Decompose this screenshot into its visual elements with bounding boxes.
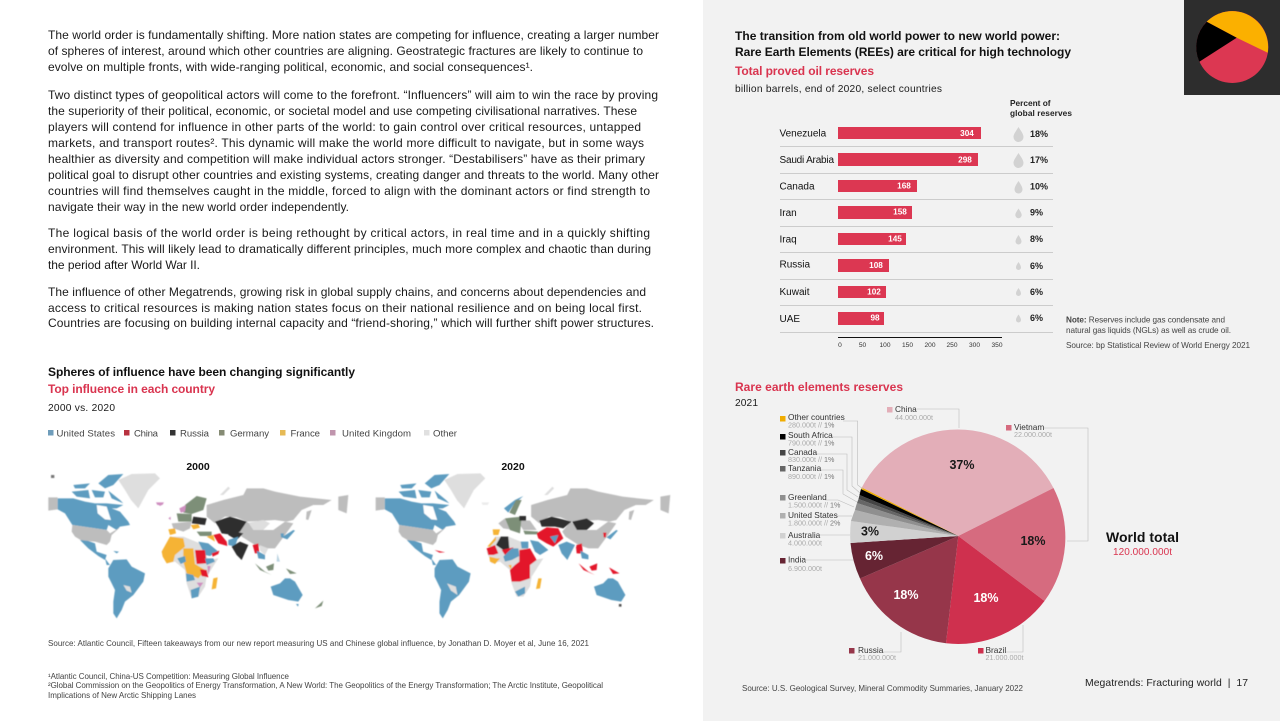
- body text: Countries are focusing on building internal capacity and “friend-shoring,” which will further shift power structures.: [48, 316, 654, 330]
- map legend: France: [290, 428, 320, 440]
- map: 2020: [376, 473, 670, 618]
- bar chart: oil reserves: 145: [888, 234, 902, 244]
- bar chart: oil reserves: 18%: [1030, 129, 1048, 139]
- heading: transition to new world power: Total proved oil reserves: [735, 64, 874, 78]
- bar chart: oil reserves: Saudi Arabia: [780, 155, 834, 166]
- bar chart: oil reserves: 6%: [1030, 313, 1043, 323]
- pie labels: left: 1.500.000t // 1%: [788, 500, 841, 510]
- pie labels: left: Tanzania: [788, 463, 822, 473]
- bar chart: oil reserves: 150: [902, 342, 913, 349]
- pie labels: left: Greenland: [788, 492, 827, 502]
- world total callout: [1106, 529, 1179, 558]
- pie labels: left: United States: [788, 510, 838, 520]
- map legend: China: [134, 428, 159, 440]
- body text: The world order is fundamentally shifting. More nation states are competing for influence, creating a larger number: [48, 28, 659, 42]
- body text: markets, and transport routes². This dynamic will make the world more difficult to navigate, but in some ways: [48, 136, 644, 150]
- pie labels: left: Canada: [788, 447, 817, 457]
- bar chart: oil reserves: 98: [870, 314, 880, 322]
- map legend: Other: [433, 428, 458, 440]
- pie labels: top and bottom: [849, 404, 1052, 662]
- pie labels: left: 830.000t // 1%: [788, 455, 835, 464]
- world total callout: World total: [1106, 529, 1179, 545]
- pie chart: rare earth reserves: [850, 430, 1065, 644]
- bar chart: oil reserves: UAE: [780, 314, 800, 325]
- bar chart: oil reserves: Iraq: [780, 234, 797, 246]
- bar chart: oil reserves: 50: [859, 342, 866, 349]
- pie labels: left: 6.900.000t: [788, 564, 822, 573]
- map label: 2020: 2020: [501, 461, 525, 473]
- bar chart: oil reserves: [780, 127, 1053, 349]
- bar chart: oil reserves: 158: [893, 208, 907, 216]
- footnotes: ²Global Commission on the Geopolitics of Energy Transformation, A New World: The Geopolitics of the Energy Transformation; The Arctic Institute, Geopolitical: [48, 681, 603, 690]
- pie chart: rare earth reserves: 18%: [893, 588, 919, 602]
- pie labels: left: 1.800.000t // 2%: [788, 518, 841, 528]
- pie labels: top and bottom: Brazil: [986, 645, 1006, 655]
- pie labels: top and bottom: Russia: [858, 645, 884, 655]
- world total callout: 120.000.000t: [1113, 547, 1172, 558]
- pie labels: top and bottom: China: [895, 404, 917, 414]
- bar chart: oil reserves: 108: [869, 261, 883, 270]
- bar chart: oil reserves: Russia: [780, 260, 811, 270]
- pie chart: rare earth reserves: 18%: [1020, 534, 1046, 548]
- body text: [48, 28, 659, 330]
- map: 2000: [48, 473, 348, 618]
- heading: spheres of influence: 2000 vs. 2020: [48, 403, 115, 414]
- note and source: oil reserves: [1066, 316, 1250, 350]
- bar chart: oil reserves: 200: [924, 342, 936, 349]
- bar chart: oil reserves: 17%: [1030, 155, 1048, 165]
- bar chart: oil reserves: 6%: [1030, 287, 1043, 297]
- bar chart: oil reserves: 304: [960, 129, 974, 138]
- heading: rare earth elements: 2021: [735, 398, 758, 409]
- map legend: [48, 428, 458, 440]
- bar chart: oil reserves: 6%: [1030, 261, 1043, 271]
- column heading: percent of global reserves: global reserves: [1010, 108, 1072, 118]
- body text: players will contend for influence in other parts of the world: to gain control over critical resources, untapped: [48, 120, 641, 134]
- note and source: oil reserves: Note: Reserves include gas condensate and: [1066, 316, 1225, 324]
- bar chart: oil reserves: 350: [991, 342, 1003, 349]
- pie labels: left: 890.000t // 1%: [788, 472, 835, 481]
- heading: rare earth elements: [735, 380, 903, 409]
- bar chart: oil reserves: 8%: [1030, 234, 1043, 244]
- bar chart: oil reserves: 168: [897, 182, 911, 190]
- footnotes: [48, 672, 603, 700]
- pie labels: left: Australia: [788, 530, 821, 540]
- note and source: oil reserves: natural gas liquids (NGLs) as well as crude oil.: [1066, 326, 1231, 335]
- body text: political goal to disrupt other countries and existing systems, creating danger and threats to the world. Many other: [48, 168, 659, 182]
- source: pie: Source: U.S. Geological Survey, Mineral Commodity Summaries, January 2022: [742, 684, 1024, 693]
- body text: Two distinct types of geopolitical actors will come to the forefront. “Influencers” will aim to win the race by proving: [48, 88, 658, 102]
- heading: spheres of influence: [48, 365, 355, 414]
- pie labels: top and bottom: 22.000.000t: [1014, 430, 1052, 439]
- panel: right background: [703, 0, 1280, 721]
- bar chart: oil reserves: 10%: [1030, 182, 1048, 192]
- bar chart: oil reserves: 250: [946, 342, 958, 349]
- body text: healthier as diversity and competition will make individual actors stronger. “Destabilisers” have as their primary: [48, 152, 645, 166]
- footnotes: ¹Atlantic Council, China-US Competition: Measuring Global Influence: [48, 672, 290, 681]
- map legend: Germany: [230, 428, 269, 440]
- heading: transition to new world power: Rare Earth Elements (REEs) are critical for high technology: [735, 45, 1071, 59]
- pie labels: left: 790.000t // 1%: [788, 438, 835, 448]
- heading: transition to new world power: [735, 29, 1071, 95]
- bar chart: oil reserves: 102: [867, 288, 881, 296]
- body text: navigate their way in the new world order independently.: [48, 200, 349, 214]
- pie labels: left: India: [788, 554, 806, 564]
- pie labels: left: Other countries: [788, 412, 845, 422]
- pie chart: rare earth reserves: 3%: [861, 524, 879, 538]
- bar chart: oil reserves: 300: [969, 342, 980, 349]
- icon: logo with pie mark: [1184, 0, 1280, 95]
- bar chart: oil reserves: 9%: [1030, 208, 1043, 218]
- pie labels: left: 280.000t // 1%: [788, 420, 835, 430]
- body text: environment. This will likely lead to dramatically different principles, much more complex and chaotic than during: [48, 242, 651, 256]
- bar chart: oil reserves: 100: [879, 342, 891, 349]
- body text: access to critical resources is making nation states focus on their national resilience and on being local first.: [48, 301, 642, 315]
- pie labels: top and bottom: 44.000.000t: [895, 413, 933, 422]
- body text: the superiority of their political, economic, or societal model and use competing civilisational narratives. These: [48, 104, 637, 118]
- heading: spheres of influence: Top influence in each country: [48, 382, 215, 396]
- bar chart: oil reserves: Kuwait: [780, 287, 810, 298]
- bar chart: oil reserves: Venezuela: [780, 128, 827, 140]
- column heading: percent of global reserves: Percent of: [1010, 98, 1051, 108]
- heading: spheres of influence: Spheres of influence have been changing significantly: [48, 365, 355, 379]
- map legend: United States: [56, 428, 115, 440]
- body text: evolve on multiple fronts, with wide-ranging political, economic, and social consequences¹.: [48, 60, 533, 74]
- source: maps: Source: Atlantic Council, Fifteen takeaways from our new report measuring US and Chinese global influence, by Jonathan D. Moyer et al, June 16, 2021: [48, 639, 590, 648]
- bar chart: oil reserves: 0: [838, 342, 842, 349]
- footnotes: Implications of New Arctic Shipping Lanes: [48, 691, 196, 700]
- heading: transition to new world power: billion barrels, end of 2020, select countries: [735, 84, 942, 95]
- note and source: oil reserves: Source: bp Statistical Review of World Energy 2021: [1066, 341, 1250, 350]
- map legend: Russia: [180, 428, 210, 440]
- map label: 2000: 2000: [186, 461, 210, 473]
- bar chart: oil reserves: Canada: [780, 182, 815, 192]
- pie labels: top and bottom: Vietnam: [1014, 422, 1044, 432]
- pie leader lines: [806, 409, 1088, 652]
- map legend: United Kingdom: [342, 428, 411, 440]
- heading: rare earth elements: Rare earth elements reserves: [735, 380, 903, 394]
- body text: The influence of other Megatrends, growing risk in global supply chains, and concerns about dependencies and: [48, 285, 646, 299]
- bar chart: oil reserves: 298: [958, 156, 972, 164]
- pie labels: left: [780, 412, 845, 573]
- heading: transition to new world power: The transition from old world power to new world power:: [735, 29, 1060, 43]
- bar chart: oil reserves: Iran: [780, 208, 797, 219]
- pie labels: left: South Africa: [788, 430, 833, 440]
- pie chart: rare earth reserves: 6%: [865, 549, 883, 563]
- page footer: Megatrends: Fracturing world | 17: [1085, 678, 1248, 689]
- body text: countries will find themselves caught in the middle, forced to align with the dominant actors or find strength to: [48, 184, 650, 198]
- body text: of spheres of interest, around which other countries are aligning. Geostrategic fractures are likely to continue to: [48, 44, 643, 58]
- body text: the period after World War II.: [48, 258, 200, 272]
- pie chart: rare earth reserves: 18%: [973, 591, 999, 605]
- body text: The logical basis of the world order is being rethought by critical actors, in real time and in a quickly shifting: [48, 226, 650, 240]
- pie labels: top and bottom: 21.000.000t: [986, 653, 1023, 662]
- pie chart: rare earth reserves: 37%: [949, 458, 975, 472]
- pie labels: top and bottom: 21.000.000t: [858, 653, 896, 662]
- column heading: percent of global reserves: [1010, 98, 1072, 118]
- pie labels: left: 4.000.000t: [788, 538, 822, 548]
